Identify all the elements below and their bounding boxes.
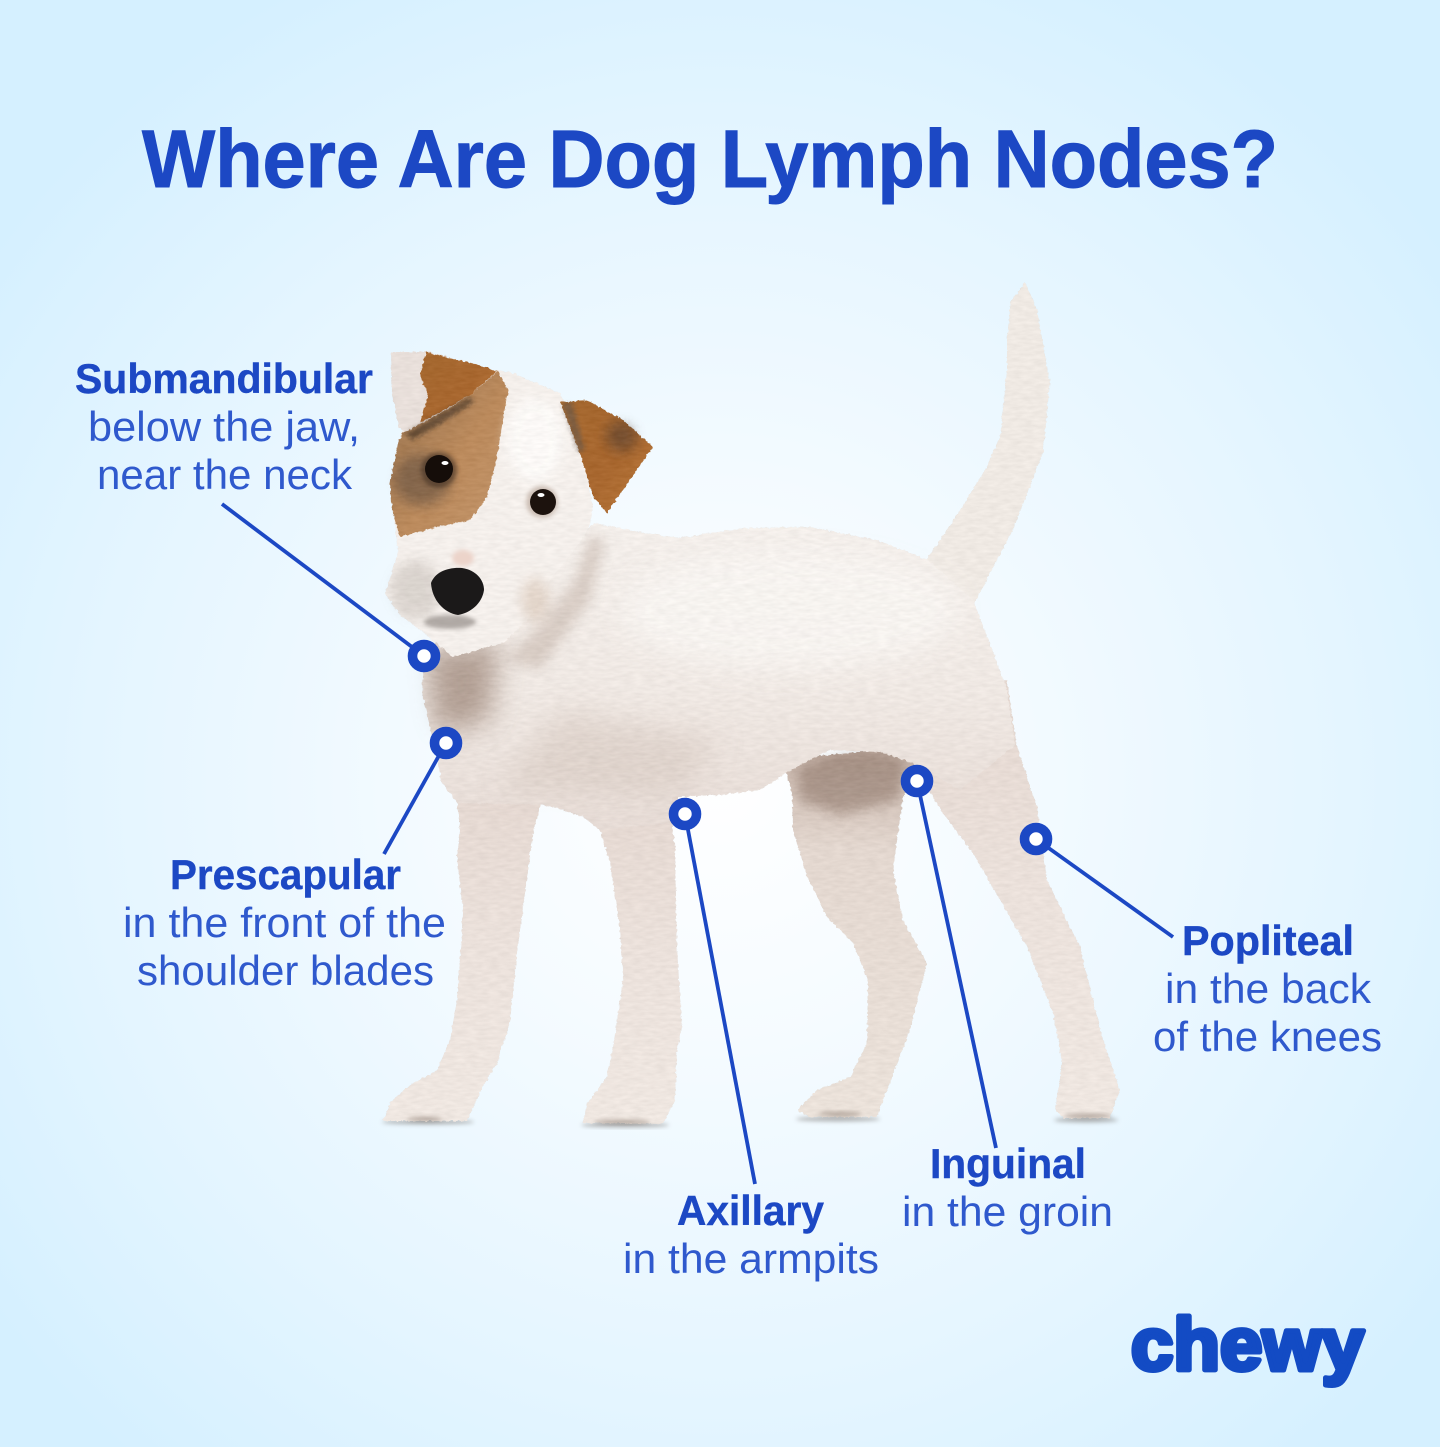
right ear (560, 400, 653, 513)
label: Prescapular (170, 851, 401, 898)
leader line (917, 781, 996, 1148)
face brown patch (390, 370, 508, 537)
leader line (685, 814, 755, 1184)
label (1153, 917, 1382, 1060)
label: Popliteal (1182, 917, 1354, 964)
muzzle shading (389, 560, 441, 620)
marker (412, 644, 436, 668)
ear fold shadow (405, 397, 474, 440)
leader line (222, 504, 424, 656)
logo: chewy: chewy (1131, 1303, 1364, 1386)
nose (424, 550, 484, 629)
title: Where Are Dog Lymph Nodes? (142, 114, 1278, 205)
callout: axillary (623, 802, 879, 1282)
label: below the jaw, (88, 403, 360, 450)
far hind leg (783, 745, 927, 1117)
right ear base fur (562, 402, 585, 452)
label (623, 1187, 879, 1282)
left ear (391, 352, 497, 432)
label (902, 1140, 1113, 1235)
left eye (421, 452, 457, 488)
label: Inguinal (930, 1140, 1086, 1187)
front leg left (383, 780, 542, 1121)
body highlight (620, 550, 960, 670)
far leg thigh shadow (798, 750, 906, 815)
head (385, 370, 593, 657)
neck fold shading (505, 535, 605, 670)
label: Submandibular (75, 355, 373, 402)
eye shadow patch (394, 454, 450, 506)
label: in the back (1165, 965, 1372, 1012)
forehead white (507, 398, 563, 482)
label (123, 851, 446, 994)
body (422, 523, 1015, 830)
callout: submandibular (75, 355, 436, 668)
marker (906, 770, 928, 792)
label: of the knees (1153, 1013, 1382, 1060)
right eye (526, 486, 558, 518)
dog fur coat (383, 282, 1120, 1124)
tail (925, 282, 1050, 606)
label: in the groin (902, 1188, 1113, 1235)
callout: inguinal (902, 770, 1113, 1235)
chest shadow (425, 640, 500, 735)
label: in the front of the (123, 899, 446, 946)
marker (674, 802, 696, 826)
right ear dark patch (606, 420, 638, 452)
callout: prescapular (123, 732, 458, 994)
label: shoulder blades (137, 947, 434, 994)
label: near the neck (97, 451, 353, 498)
leader line (1036, 839, 1173, 937)
paw ground shadows (382, 1116, 1118, 1128)
paw toes (407, 1112, 1112, 1124)
marker (434, 732, 458, 754)
near hind leg (905, 680, 1120, 1118)
front leg right (583, 790, 682, 1124)
left ear brown (420, 352, 496, 423)
callout: popliteal (1024, 828, 1382, 1060)
label: in the armpits (623, 1235, 879, 1282)
label: Axillary (677, 1187, 825, 1234)
label (75, 355, 373, 498)
dog photo illustration (382, 282, 1120, 1128)
body fold shading (500, 710, 720, 795)
leader line (384, 743, 446, 854)
marker (1024, 828, 1048, 850)
